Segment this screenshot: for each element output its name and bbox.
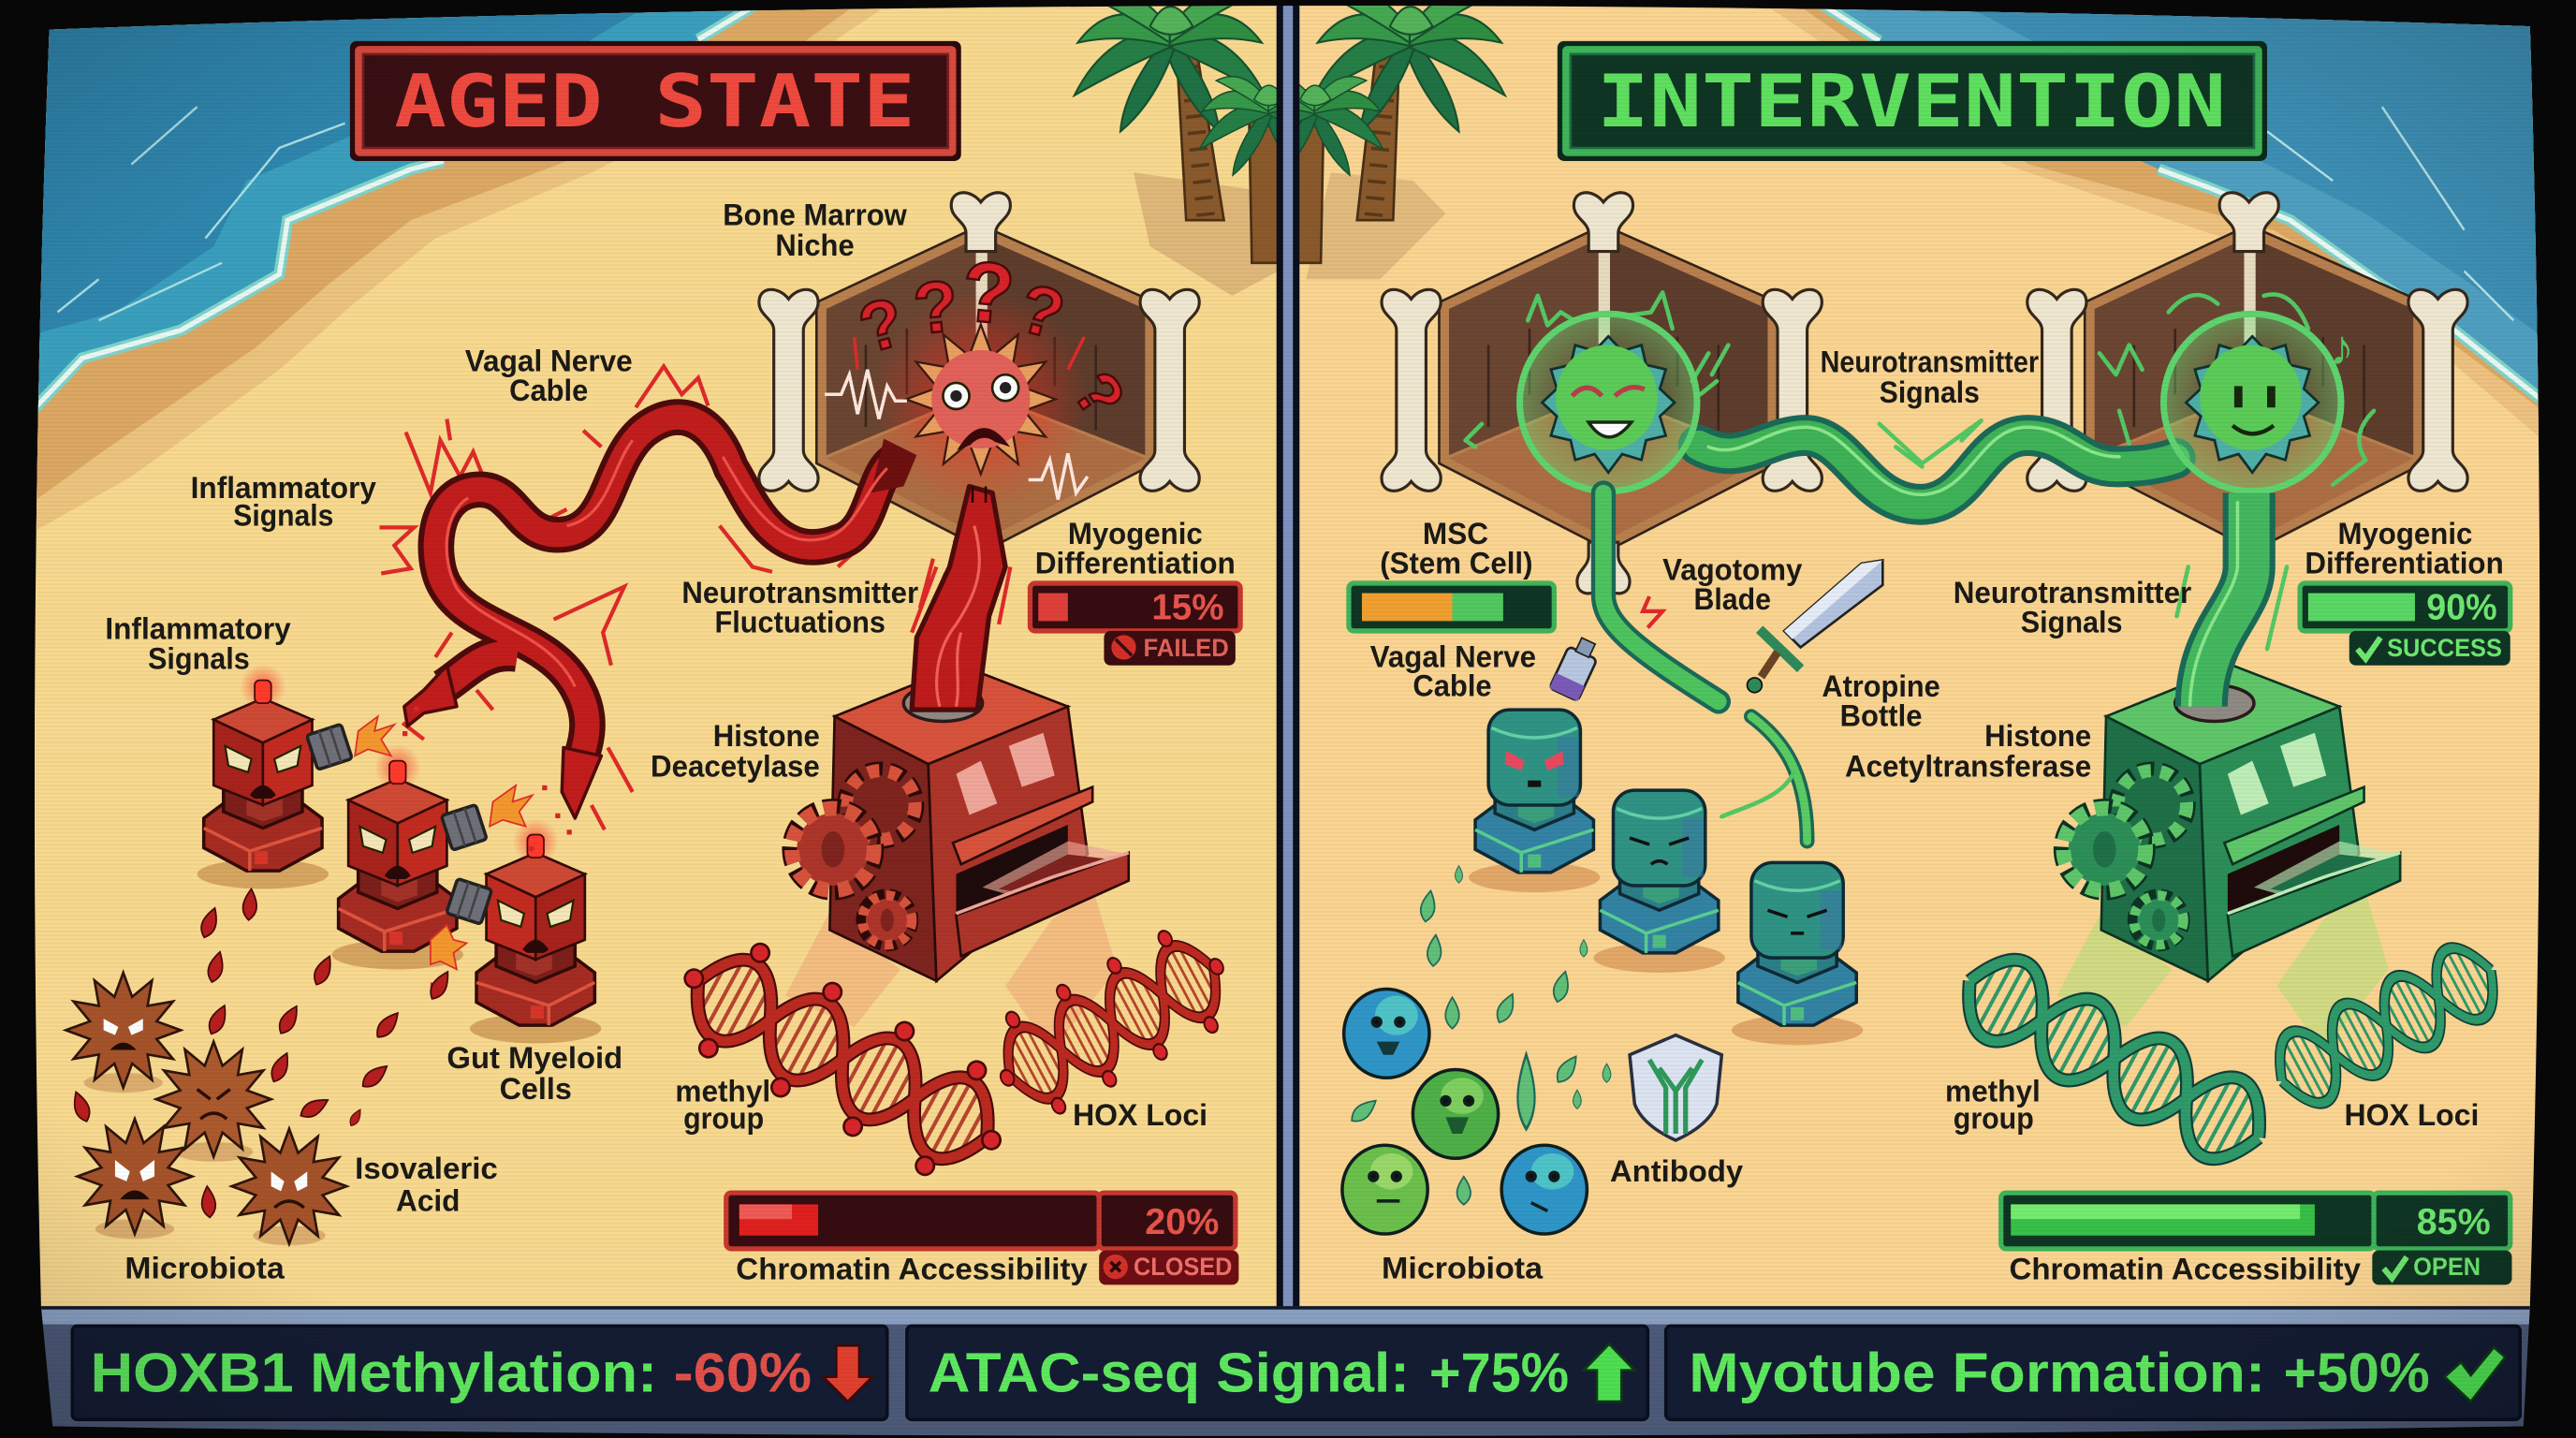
icon: confused question marks <box>860 261 1122 411</box>
icon: music note: ♪ <box>2330 321 2354 376</box>
icon: antibody shield <box>1630 1035 1721 1140</box>
dna: methyl group strand <box>1949 943 2279 1176</box>
icon: stressed stem cell <box>882 298 1081 491</box>
label: myogenic differentiation: Myogenic <box>2337 517 2472 550</box>
title: intervention <box>1558 41 2267 161</box>
badge: failed: FAILED <box>1144 633 1229 662</box>
machine: histone deacetylase <box>785 666 1129 1051</box>
dna: hox loci strand <box>1000 930 1224 1115</box>
label: neurotransmitter signals lower <box>1954 576 2192 639</box>
icon: heartbeat signals <box>825 337 1088 500</box>
badge: closed: CLOSED <box>1134 1252 1232 1281</box>
bone marrow niche <box>759 193 1199 594</box>
gauge: chromatin accessibility 20% <box>726 1193 1236 1249</box>
turret: gut myeloid cell 3 <box>446 818 601 1043</box>
label: neurotransmitter signals upper: Signals <box>1880 375 1980 409</box>
label: myogenic differentiation: Differentiation <box>1035 547 1236 580</box>
icon: confused question marks: ? <box>910 265 962 350</box>
label: myogenic differentiation: Myogenic <box>1068 517 1203 550</box>
icon: confused question marks: ? <box>851 282 912 368</box>
labels: intervention <box>1370 345 2504 1285</box>
label: histone deacetylase <box>651 719 820 783</box>
label: methyl group <box>1945 1075 2041 1136</box>
icon: confused question marks: ? <box>1012 268 1073 354</box>
title: aged state: AGED STATE <box>394 60 915 144</box>
isovaleric acid drops <box>69 888 454 1218</box>
muzzle flashes <box>355 707 572 990</box>
stat: hoxb1 methylation: -60% <box>674 1342 812 1404</box>
label: inflammatory signals lower <box>105 612 291 675</box>
icon: neural signals <box>1466 292 2374 485</box>
icon: vagotomy sword <box>1748 560 1882 693</box>
stat: myotube formation: +50% <box>2284 1342 2430 1404</box>
labels: aged state <box>105 198 1236 1285</box>
label: antibody: Antibody <box>1610 1154 1743 1188</box>
badge: open: OPEN <box>2413 1252 2481 1281</box>
label: histone deacetylase: Deacetylase <box>651 749 820 783</box>
badge: closed <box>1099 1251 1238 1284</box>
label: microbiota: Microbiota <box>1382 1251 1544 1284</box>
icon: confused question marks: ? <box>958 243 1018 343</box>
label: isovaleric acid: Isovaleric <box>355 1152 498 1185</box>
label: inflammatory signals lower: Inflammatory <box>105 612 291 646</box>
gauge: chromatin accessibility 85%: 85% <box>2417 1202 2491 1242</box>
label: vagal nerve cable <box>1370 640 1536 702</box>
label: vagotomy blade: Blade <box>1693 582 1771 616</box>
stat: atac-seq signal: +75% <box>1429 1342 1569 1404</box>
label: vagotomy blade <box>1662 553 1802 616</box>
label: bone marrow niche <box>723 198 908 262</box>
label: inflammatory signals upper: Inflammatory <box>191 471 376 505</box>
vagal nerve cable <box>404 418 916 818</box>
label: bone marrow niche: Niche <box>775 228 855 262</box>
icon: green check mark <box>2445 1347 2505 1401</box>
badge: failed <box>1104 631 1236 666</box>
label: myogenic differentiation <box>2305 517 2504 580</box>
icon: green up arrow <box>1584 1344 1634 1401</box>
stat: myotube formation <box>1666 1326 2520 1419</box>
label: bone marrow niche: Bone Marrow <box>723 198 908 231</box>
label: vagal nerve cable <box>465 345 633 407</box>
label: hox loci: HOX Loci <box>1073 1098 1208 1132</box>
green nerve into machine <box>2176 493 2287 707</box>
icon: confused question marks: ? <box>1059 360 1137 431</box>
label: neurotransmitter signals lower: Signals <box>2021 606 2123 639</box>
icon: atropine bottle <box>1549 635 1603 701</box>
label: msc stem cell: MSC <box>1423 517 1488 550</box>
angry microbiota <box>66 973 346 1245</box>
sparks around the nerve <box>379 366 1010 829</box>
stat: atac-seq signal: ATAC-seq Signal: <box>929 1342 1410 1404</box>
tower: sleeping myeloid cell 1 <box>1469 710 1600 892</box>
turret: gut myeloid cell 1 <box>198 664 352 888</box>
badge: success: SUCCESS <box>2387 633 2502 662</box>
label: vagotomy blade: Vagotomy <box>1662 553 1802 587</box>
label: hox loci: HOX Loci <box>2344 1098 2479 1132</box>
severed green nerve <box>1603 493 1808 842</box>
nerve into machine <box>912 486 1005 710</box>
label: neurotransmitter signals upper: Neurotransmitter <box>1821 345 2039 379</box>
gauge: myogenic differentiation 15%: 15% <box>1151 588 1224 628</box>
center divider <box>1277 0 1299 1310</box>
label: histone deacetylase: Histone <box>713 719 820 753</box>
stat: hoxb1 methylation <box>72 1326 887 1419</box>
label: neurotransmitter signals lower: Neurotransmitter <box>1954 576 2192 609</box>
label: atropine bottle: Bottle <box>1840 699 1922 733</box>
palm trees <box>1246 0 1505 263</box>
tower: sleeping myeloid cell 2 <box>1593 790 1725 973</box>
icon: happy stem cell <box>1519 314 1697 492</box>
label: gut myeloid cells: Gut Myeloid <box>446 1041 622 1075</box>
panel: aged state <box>0 0 1337 1310</box>
label: methyl group: group <box>683 1102 764 1136</box>
beach and ocean <box>36 8 883 530</box>
gauge: chromatin accessibility 20%: 20% <box>1145 1202 1219 1242</box>
label: histone acetyltransferase: Histone <box>1984 719 2091 753</box>
label: atropine bottle: Atropine <box>1822 669 1940 703</box>
stats bar <box>0 1306 2576 1438</box>
label: inflammatory signals lower: Signals <box>148 641 250 675</box>
gauge: myogenic differentiation 90%: 90% <box>2426 588 2497 628</box>
label: vagal nerve cable: Cable <box>1412 668 1492 702</box>
label: methyl group: group <box>1954 1102 2034 1136</box>
gauge: chromatin accessibility 85% <box>2001 1193 2510 1249</box>
label: msc stem cell <box>1380 517 1532 580</box>
stat: atac-seq signal <box>907 1326 1647 1419</box>
blood sparks at cut <box>1643 596 1662 627</box>
dna: methyl group strand <box>683 942 1002 1176</box>
gauge: msc stem cell <box>1349 583 1554 631</box>
dna: hox loci strand <box>2263 936 2509 1115</box>
label: vagal nerve cable: Vagal Nerve <box>1370 640 1536 674</box>
bone marrow niche: left <box>1382 193 1822 594</box>
label: methyl group: methyl <box>675 1075 770 1108</box>
label: inflammatory signals upper <box>191 471 376 533</box>
title: intervention: INTERVENTION <box>1597 60 2226 144</box>
label: histone acetyltransferase: Acetyltransferase <box>1845 749 2091 783</box>
turret: gut myeloid cell 2 <box>332 744 487 969</box>
label: chromatin accessibility: Chromatin Accessibility <box>2009 1252 2361 1285</box>
label: methyl group: methyl <box>1945 1075 2041 1108</box>
gauge: myogenic differentiation 15% <box>1030 583 1240 631</box>
title: aged state <box>350 41 961 161</box>
label: vagal nerve cable: Cable <box>509 374 588 407</box>
label: neurotransmitter fluctuations: Neurotransmitter <box>681 576 918 609</box>
green nerve link <box>1699 427 2175 505</box>
icon: red down arrow <box>823 1345 872 1401</box>
label: neurotransmitter signals upper <box>1821 345 2039 409</box>
bone marrow niche: right <box>2027 193 2467 550</box>
label: atropine bottle <box>1822 669 1940 733</box>
label: isovaleric acid <box>355 1152 498 1217</box>
stat: hoxb1 methylation: HOXB1 Methylation: <box>91 1342 657 1404</box>
friendly microbiota <box>1342 990 1587 1234</box>
label: gut myeloid cells: Cells <box>500 1072 572 1106</box>
panel: intervention <box>1246 0 2576 1310</box>
label: msc stem cell: (Stem Cell) <box>1380 547 1532 580</box>
label: neurotransmitter fluctuations: Fluctuations <box>714 606 886 639</box>
palm trees <box>1072 6 1277 264</box>
stat: myotube formation: Myotube Formation: <box>1689 1342 2265 1404</box>
label: myogenic differentiation: Differentiation <box>2305 547 2504 580</box>
green drops <box>1348 866 1611 1205</box>
label: vagal nerve cable: Vagal Nerve <box>465 345 633 378</box>
gauge: myogenic differentiation 90% <box>2300 583 2510 631</box>
label: microbiota: Microbiota <box>124 1251 285 1284</box>
machine: histone acetyltransferase <box>2056 666 2400 1051</box>
beach and ocean <box>1758 0 2576 468</box>
label: methyl group <box>675 1075 770 1136</box>
label: histone acetyltransferase <box>1845 719 2091 783</box>
badge: success <box>2349 631 2510 666</box>
label: inflammatory signals upper: Signals <box>233 499 333 533</box>
label: chromatin accessibility: Chromatin Accessibility <box>736 1252 1088 1285</box>
neurotransmitter wave <box>1880 420 1982 466</box>
label: isovaleric acid: Acid <box>396 1183 460 1217</box>
label: neurotransmitter fluctuations <box>681 576 918 639</box>
label: myogenic differentiation <box>1035 517 1236 580</box>
label: gut myeloid cells <box>446 1041 622 1106</box>
badge: open <box>2372 1251 2511 1284</box>
tower: sleeping myeloid cell 3 <box>1732 862 1863 1045</box>
icon: calm stem cell <box>2163 314 2341 492</box>
